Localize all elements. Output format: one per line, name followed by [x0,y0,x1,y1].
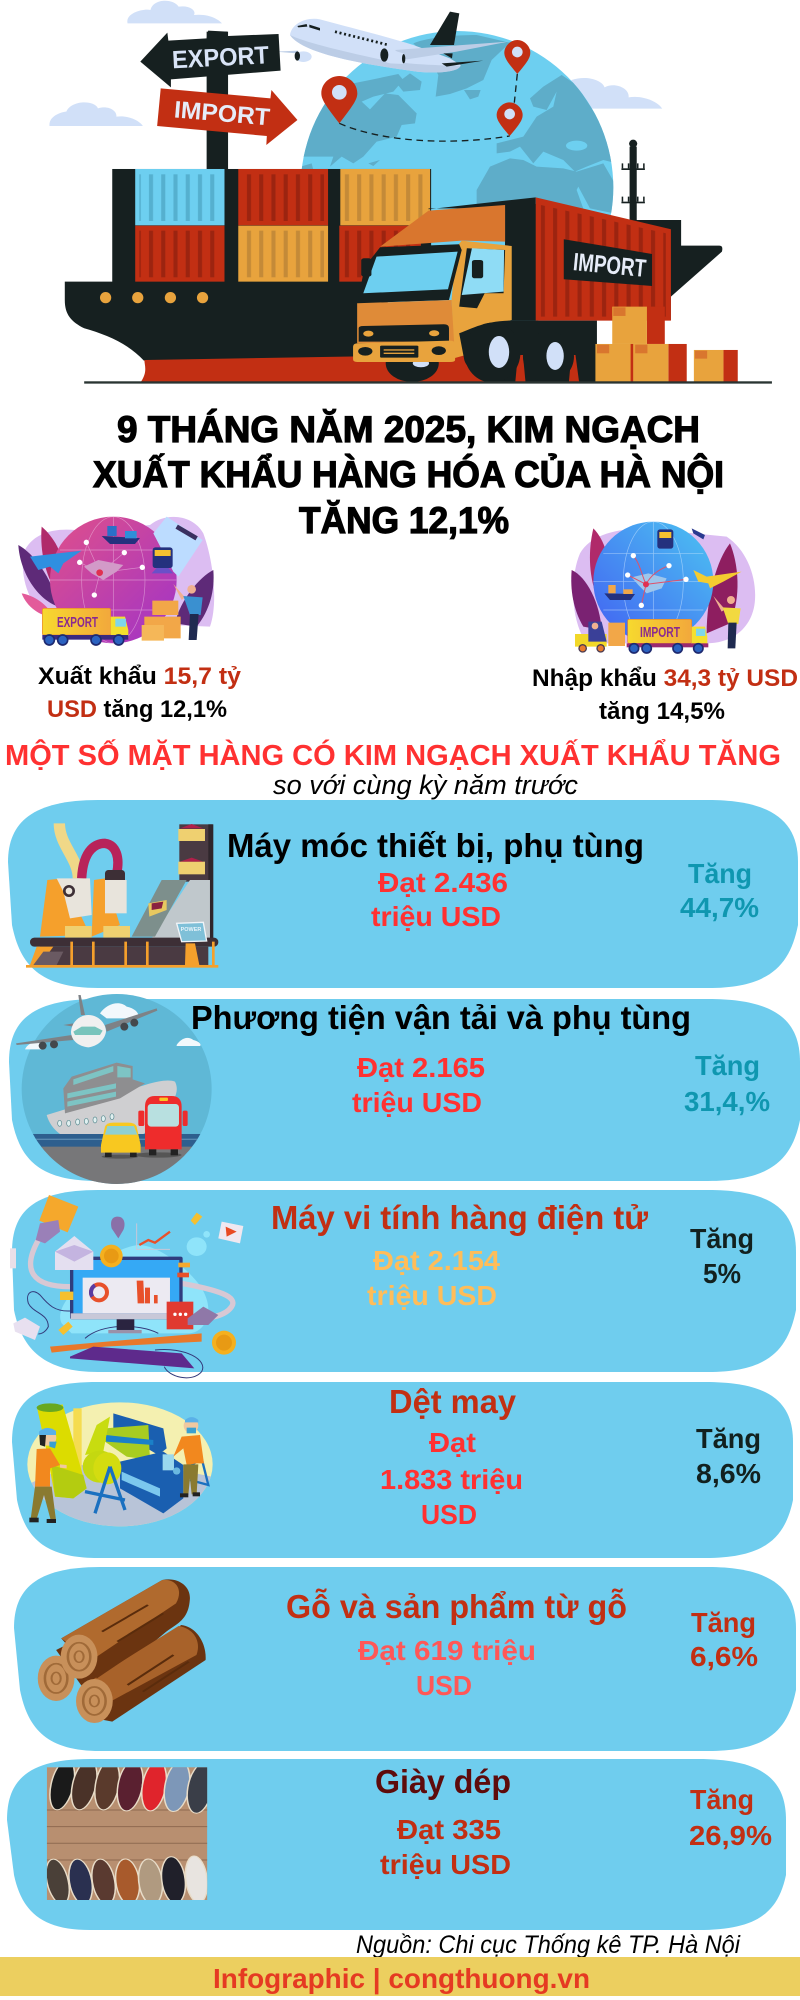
value: footwear: Đạt 335 [397,1814,501,1845]
text block: import figure: tăng 14,5% [599,698,725,725]
growth: wood: 6,6% [690,1641,758,1672]
icon: truck: IMPORT [572,248,647,283]
growth: machinery: Tăng [688,858,752,889]
growth: footwear: 26,9% [689,1820,772,1851]
growth: machinery [680,858,759,923]
growth: vehicles [684,1050,770,1117]
icon: computer and electronics [10,1195,243,1378]
source note: Nguồn: Chi cục Thống kê TP. Hà Nội [356,1931,741,1959]
value: vehicles: triệu USD [352,1087,482,1118]
icon: signpost import [157,88,297,145]
growth: electronics: Tăng [690,1223,754,1254]
panel: machinery [8,800,798,988]
growth: wood: Tăng [691,1607,756,1638]
value: electronics: Đạt 2.154 [373,1245,500,1276]
growth: electronics: 5% [703,1258,741,1289]
heading: wood: Gỗ và sản phẩm từ gỗ [286,1588,627,1625]
text: power sign: POWER [181,927,201,933]
value: vehicles [352,1052,485,1118]
section heading: MỘT SỐ MẶT HÀNG CÓ KIM NGẠCH XUẤT KHẨU TĂNG [5,738,781,772]
ground line [84,381,772,384]
text block: export figure: USD tăng 12,1% [47,696,227,723]
value: wood [358,1635,536,1701]
text block: import figure [532,665,798,725]
value: textiles: USD [421,1499,477,1530]
icon: globe with location pins and airplane [275,12,617,344]
heading: footwear: Giày dép [375,1763,511,1800]
icon: ship hull with mast [65,140,722,363]
photo: rows of shoes on wooden floor [46,1767,208,1900]
text: truck label export: EXPORT [57,614,98,631]
heading: electronics: Máy vi tính hàng điện tử [271,1199,648,1236]
icon: signpost import: IMPORT [173,96,271,131]
icon: export illustration [18,517,214,645]
value: wood: USD [416,1670,472,1701]
value: textiles [380,1427,523,1530]
growth: wood [690,1607,758,1672]
panel: footwear [7,1759,786,1930]
icon: factory machine [26,823,218,968]
icon: hull waterline [141,353,587,382]
heading: textiles: Dệt may [389,1383,517,1420]
value: machinery: Đạt 2.436 [378,867,508,898]
icon: wooden logs [38,1579,206,1723]
icon: location pins [321,40,530,136]
panel: vehicles [9,994,800,1187]
icon: textile factory [27,1402,220,1528]
growth: electronics [690,1223,754,1289]
icon: truck [353,197,671,383]
growth: vehicles: 31,4,% [684,1086,770,1117]
icon: portholes [100,292,208,303]
text block: export figure: Xuất khẩu 15,7 tỷ [38,663,242,690]
icon: airplane [275,12,508,73]
value: vehicles: Đạt 2.165 [357,1052,485,1083]
icon: cardboard boxes [595,307,738,382]
heading: machinery: Máy móc thiết bị, phụ tùng [227,827,644,864]
growth: footwear [689,1784,772,1851]
value: wood: Đạt 619 triệu [358,1635,536,1666]
value: textiles: 1.833 triệu [380,1464,523,1495]
growth: textiles [696,1423,761,1489]
title [93,409,724,541]
icon: shipping containers [135,169,430,282]
text block: import figure: Nhập khẩu 34,3 tỷ USD [532,665,798,692]
panel: wood [14,1567,796,1751]
value: machinery: triệu USD [371,901,501,932]
hero illustration: cargo ship, truck, globe and export/import signs [49,1,772,384]
footer text: Infographic | congthuong.vn [213,1963,590,1994]
title: TĂNG 12,1% [299,500,509,541]
value: footwear [380,1814,511,1880]
icon: signpost export [140,31,281,172]
growth: footwear: Tăng [690,1784,754,1815]
text: truck label import: IMPORT [640,624,680,641]
heading: vehicles: Phương tiện vận tải và phụ tùng [191,999,691,1036]
value: machinery [371,867,508,932]
section subheading: so với cùng kỳ năm trước [273,770,579,800]
panel: electronics [10,1190,796,1378]
title: XUẤT KHẨU HÀNG HÓA CỦA HÀ NỘI [93,453,724,495]
icon: import illustration [571,522,755,653]
icon: plane, ship and vehicles [16,994,217,1187]
value: electronics: triệu USD [367,1280,497,1311]
growth: textiles: Tăng [696,1423,761,1454]
text block: export figure [38,663,242,723]
title: 9 THÁNG NĂM 2025, KIM NGẠCH [117,409,700,450]
icon: signpost export: EXPORT [171,41,270,74]
icon: route dashes [339,74,517,141]
value: textiles: Đạt [429,1427,476,1458]
value: electronics [367,1245,500,1311]
growth: textiles: 8,6% [696,1458,761,1489]
footer band [0,1957,800,1996]
panel: textiles [12,1382,793,1558]
growth: machinery: 44,7% [680,892,759,923]
growth: vehicles: Tăng [695,1050,760,1081]
value: footwear: triệu USD [380,1849,511,1880]
icon: clouds [49,1,662,126]
